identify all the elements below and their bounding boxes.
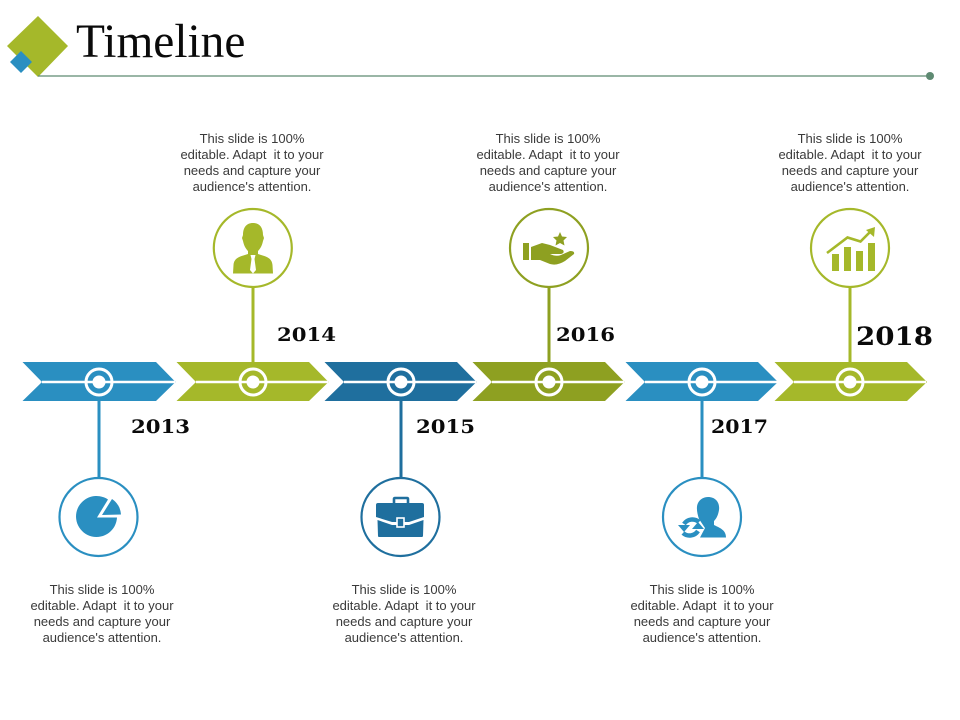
year 2014: 2014 xyxy=(277,324,336,346)
chevron 2015 xyxy=(324,362,476,401)
text block 2017: This slide is 100% xyxy=(650,582,755,597)
text block 2014: This slide is 100% xyxy=(200,131,305,146)
text block 2014: audience's attention. xyxy=(193,179,311,194)
icon: businessman xyxy=(214,209,292,287)
year 2015: 2015 xyxy=(416,416,475,438)
year 2016: 2016 xyxy=(556,324,615,346)
text block 2013: This slide is 100% xyxy=(50,582,155,597)
icon: growth bar chart xyxy=(811,209,889,287)
text block 2013: editable. Adapt it to your xyxy=(30,598,174,613)
logo: green and blue diamonds xyxy=(7,16,68,77)
text block 2013: needs and capture your xyxy=(34,614,171,629)
header rule xyxy=(38,72,934,80)
text block 2018: editable. Adapt it to your xyxy=(778,147,922,162)
chevron 2016 xyxy=(472,362,624,401)
text block 2018: audience's attention. xyxy=(791,179,909,194)
icon: briefcase xyxy=(362,478,440,556)
icon: pie chart xyxy=(60,478,138,556)
chevron 2014 xyxy=(176,362,328,401)
year 2013: 2013 xyxy=(131,416,190,438)
text block 2016: audience's attention. xyxy=(489,179,607,194)
timeline arrow band xyxy=(22,362,927,401)
white centre lines xyxy=(42,381,926,383)
text block 2014: editable. Adapt it to your xyxy=(180,147,324,162)
text block 2013: audience's attention. xyxy=(43,630,161,645)
chevron 2013 xyxy=(22,362,176,401)
text block 2017: editable. Adapt it to your xyxy=(630,598,774,613)
text block 2017: audience's attention. xyxy=(643,630,761,645)
year 2018: 2018 xyxy=(856,322,933,351)
ring markers xyxy=(86,369,863,395)
text block 2015: audience's attention. xyxy=(345,630,463,645)
icon: person with refresh arrows xyxy=(663,478,741,556)
chevron 2018 xyxy=(774,362,927,401)
text block 2016: editable. Adapt it to your xyxy=(476,147,620,162)
year 2017: 2017 xyxy=(711,416,768,438)
text block 2018: needs and capture your xyxy=(782,163,919,178)
text block 2015: needs and capture your xyxy=(336,614,473,629)
chevron 2017 xyxy=(626,362,778,401)
text block 2015: editable. Adapt it to your xyxy=(332,598,476,613)
text block 2015: This slide is 100% xyxy=(352,582,457,597)
connector stems xyxy=(99,288,850,478)
text block 2014: needs and capture your xyxy=(184,163,321,178)
ring centres xyxy=(92,376,856,388)
text block 2016: needs and capture your xyxy=(480,163,617,178)
title: Timeline xyxy=(76,16,245,68)
text block 2018: This slide is 100% xyxy=(798,131,903,146)
text block 2016: This slide is 100% xyxy=(496,131,601,146)
icon: hand with star xyxy=(510,209,588,287)
text block 2017: needs and capture your xyxy=(634,614,771,629)
